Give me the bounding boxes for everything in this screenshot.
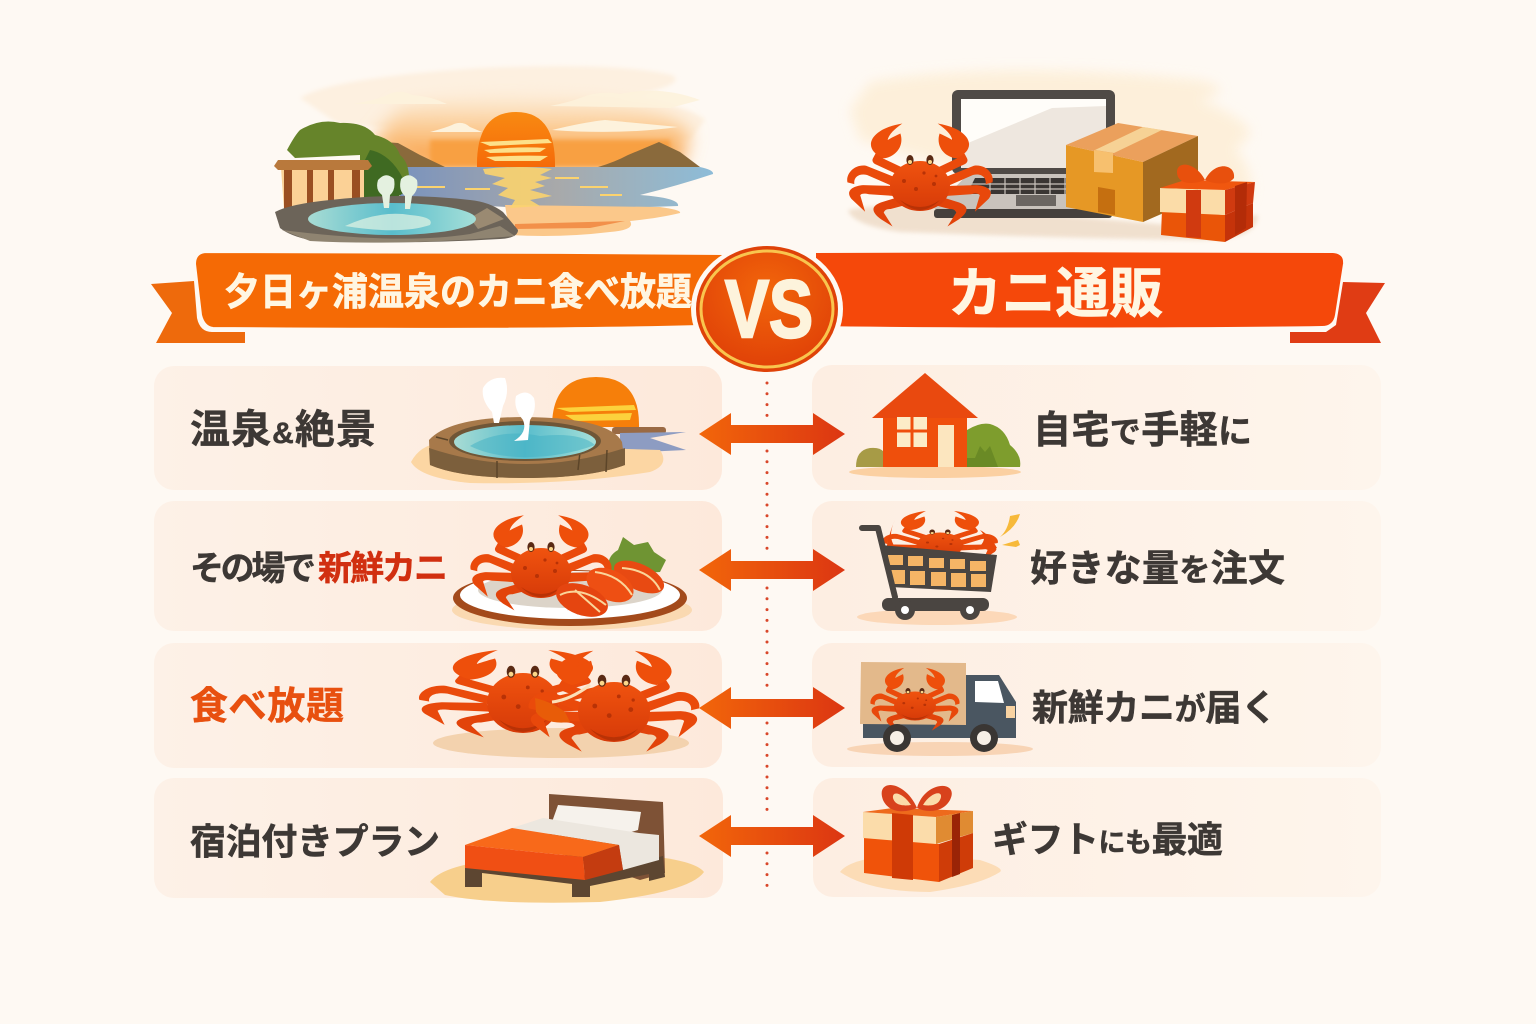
dotted centre divider [766,383,768,889]
soft wash background [850,70,1251,210]
ribbon tail [151,281,245,343]
icon: hot spring with sunset [411,377,686,483]
pavilion [274,160,372,212]
panel: left row 3 [154,643,722,768]
title text: 夕日ヶ浦温泉のカニ食べ放題 [224,272,692,314]
label: 新鮮カニ [318,550,448,588]
panel: left row 2 [154,501,722,631]
sun glitter on the sea [415,167,622,208]
steam [377,175,417,209]
pool water [308,203,476,235]
icon: bed [430,794,704,903]
panel: right row 4 [813,778,1381,897]
label: 好きな量を注文 [1030,548,1285,589]
sand [505,205,680,236]
left title ribbon [151,252,725,343]
arrow row 4 [699,815,845,857]
stone pool rim [275,196,518,242]
arrow row 1 [699,413,845,455]
label: ギフトにも最適 [992,819,1223,860]
sun reflections on the disc [480,139,552,161]
label: 新鮮カニが届く [1032,687,1277,728]
pale wash above the sky [300,66,705,140]
panel: right row 2 [812,501,1381,631]
gift box [1160,165,1255,242]
ribbon body [815,251,1344,328]
arrow row 3 [699,687,845,729]
icon: delivery truck [847,662,1033,756]
illustration: sunset onsen [274,66,713,243]
label: 宿泊付きプラン [190,821,440,862]
icon: gift box [840,785,1001,892]
laptop [934,90,1115,218]
mountains [384,142,445,167]
title text: カニ通販 [948,264,1163,324]
arrow row 2 [699,549,845,591]
crab [847,123,993,226]
sky glow [370,96,690,167]
panel: left row 4 [154,778,723,903]
panel: right row 3 [812,643,1381,767]
panel: right row 1 [812,365,1381,490]
label [190,550,448,588]
illustration: online order [847,70,1258,242]
ground shadow [848,205,1258,240]
panel: left row 1 [154,366,722,490]
icon: house [849,373,1021,478]
VS badge [691,242,843,376]
icon: crab on a plate [452,515,692,630]
icon: shopping cart with crab [857,511,1020,625]
trees [287,122,409,205]
ribbon body [195,252,725,329]
right title ribbon [815,251,1385,343]
label: その場で [190,550,316,588]
VS text: VS [725,264,813,355]
label: 温泉&絶景 [190,408,376,452]
ribbon tail [1290,282,1385,343]
sea [400,167,713,210]
label: 自宅で手軽に [1033,410,1252,452]
icon: two crabs [419,650,699,758]
label: 食べ放題 [190,686,344,728]
cardboard box [1066,123,1198,222]
sun [477,112,555,167]
clouds [353,91,700,132]
